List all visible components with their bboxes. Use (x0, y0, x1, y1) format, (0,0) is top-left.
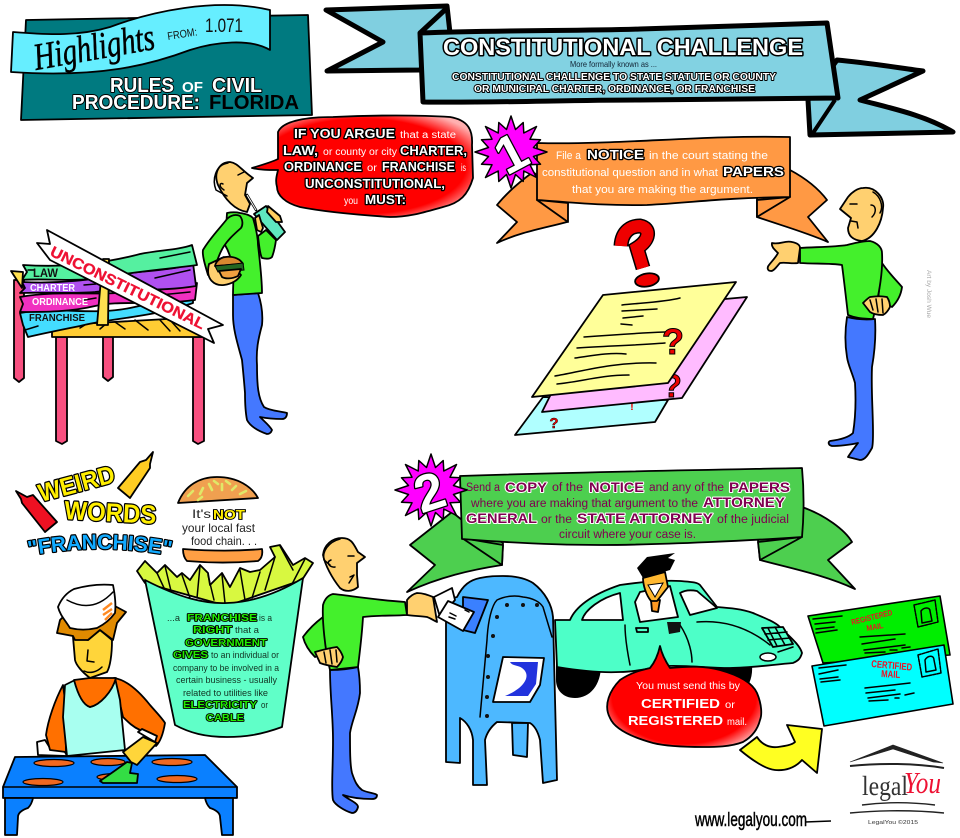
fingers on cup (267, 206, 282, 222)
weird words heading (15, 451, 174, 555)
banner front (460, 468, 804, 545)
words: WORDS (64, 495, 157, 530)
number 2: 2 (407, 461, 453, 525)
step 1 orange banner (497, 137, 828, 243)
teal panel (21, 15, 312, 120)
callout text (628, 680, 747, 728)
burst (475, 116, 547, 188)
franchise: "FRANCHISE" (26, 533, 174, 555)
driver (637, 553, 675, 612)
back leg (512, 723, 528, 757)
table legs (14, 280, 204, 444)
bun text: your local fast (182, 521, 256, 535)
pants (330, 667, 377, 813)
bubble text (283, 126, 467, 207)
carton text: FRANCHISE (187, 612, 257, 624)
paper: ordinance (20, 283, 197, 312)
step 1 text: constitutional question and in what (542, 167, 718, 179)
step 1 text: in the court stating the (649, 150, 768, 162)
logo base lines (850, 803, 944, 813)
paper marks (25, 252, 190, 330)
logo word you: You (904, 765, 941, 800)
yellow sheet (532, 282, 736, 397)
banner description: OR MUNICIPAL CHARTER, ORDINANCE, OR FRANCHISE (474, 84, 755, 95)
top bun (178, 477, 258, 503)
face (73, 630, 112, 678)
left tail (497, 172, 568, 243)
number 1: 1 (485, 122, 538, 187)
banner left tail (326, 6, 450, 71)
paper labels (29, 266, 88, 324)
heading rules of civil procedure: RULES (110, 75, 174, 97)
step 1 text: NOTICE (587, 147, 644, 162)
heading rules of civil procedure: PROCEDURE: (72, 92, 200, 114)
carton text: related to utilities like (183, 688, 268, 698)
papers with question marks: ? (662, 368, 682, 404)
car (555, 553, 802, 699)
step 2 text: STATE ATTORNEY (577, 510, 714, 526)
certified label: CERTIFIED (871, 659, 913, 674)
back arm (303, 617, 330, 657)
carton text (167, 612, 280, 724)
paper labels: LAW (33, 266, 59, 280)
step 2 text: PAPERS (729, 479, 790, 495)
step 2 text: NOTICE (589, 479, 644, 495)
papers with question marks (515, 226, 747, 435)
bun text (182, 507, 257, 548)
green envelope (808, 596, 950, 663)
pants (233, 293, 287, 434)
hand holding mail (407, 593, 437, 622)
banner description (452, 72, 776, 95)
papers with question marks: ! (630, 401, 634, 413)
callout text: mail. (727, 716, 747, 728)
carton text: CABLE (206, 712, 244, 724)
address marks (819, 665, 914, 701)
callout text: REGISTERED (628, 713, 723, 728)
from label: FROM: (167, 26, 198, 43)
header panel: highlights (11, 5, 312, 120)
banner main panel (420, 23, 838, 102)
bubble text: UNCONSTITUTIONAL, (305, 176, 445, 191)
banner front (537, 137, 790, 205)
red speech bubble (252, 116, 473, 217)
burger bun text (178, 477, 262, 562)
step 2 text: of the (552, 482, 583, 494)
banner subtitle: More formally known as ... (570, 59, 657, 69)
right sleeve (114, 678, 165, 746)
certified label: MAIL (881, 669, 900, 681)
bubble text: FRANCHISE (382, 159, 455, 174)
step 2 text: or the (541, 514, 572, 526)
paper labels: ORDINANCE (32, 297, 88, 308)
paper labels: CHARTER (30, 283, 76, 294)
car body (555, 581, 802, 672)
carton (145, 578, 303, 737)
fist (863, 296, 890, 315)
registered label: MAIL (866, 621, 884, 633)
hat (58, 585, 115, 630)
mailbox door (480, 596, 552, 717)
apron (63, 678, 125, 756)
yellow arrow (740, 725, 822, 773)
bubble text: CHARTER, (400, 143, 467, 158)
carton text: ELECTRICITY (183, 699, 257, 711)
bubble text: that a state (400, 130, 456, 141)
table top (52, 318, 203, 337)
ketchup bottle (16, 491, 57, 532)
step 2 text: ATTORNEY (703, 494, 786, 510)
paper: charter (20, 263, 196, 293)
carton text: . . . a (167, 613, 181, 623)
heading rules of civil procedure: OF (182, 79, 203, 96)
bun text: It's (192, 507, 211, 521)
rule number: 1.071 (205, 16, 243, 37)
carton text: RIGHT (193, 624, 233, 636)
left tail (407, 512, 503, 592)
headlight (760, 653, 776, 661)
unconstitutional sash (37, 230, 223, 343)
step 2 text: COPY (505, 479, 548, 495)
sash text: UNCONSTITUTIONAL (47, 243, 207, 333)
windows (582, 586, 717, 622)
burger (215, 257, 244, 278)
logo roof (850, 745, 943, 763)
man pointing at papers (768, 188, 902, 460)
registered label (850, 608, 893, 633)
door handle and mirror (636, 628, 648, 632)
heading rules of civil procedure (72, 75, 299, 114)
carton text: GIVES (173, 649, 208, 661)
registered label: REGISTERED (850, 608, 893, 627)
left sleeve (46, 685, 66, 752)
near arm (203, 215, 242, 275)
banner description: CONSTITUTIONAL CHALLENGE TO STATE STATUTE OR COUNTY (452, 72, 776, 83)
carton text: that a (235, 625, 260, 635)
bubble text: MUST: (365, 192, 406, 207)
bubble text: IF YOU ARGUE (294, 126, 395, 141)
fries (137, 545, 313, 606)
bun text: NOT (213, 507, 245, 522)
torso and arm (323, 594, 407, 670)
torso (225, 212, 262, 295)
bubble text: you (344, 196, 358, 207)
head (323, 538, 365, 591)
stamp (914, 600, 938, 627)
banner right tail (808, 60, 953, 135)
legalyou logo (850, 745, 944, 826)
header banner: constitutional challenge (326, 6, 953, 135)
registered mail envelope (808, 596, 950, 663)
carton text: to an individual or (211, 650, 279, 660)
bubble text: or (367, 163, 378, 174)
cyan ribbon (11, 5, 270, 73)
callout text: CERTIFIED (641, 696, 720, 711)
bubble text: or county or city (323, 147, 397, 158)
cuff (138, 729, 157, 742)
envelopes (434, 588, 474, 631)
collar (74, 678, 116, 707)
fries carton (137, 545, 313, 737)
mustard bottle (118, 452, 153, 498)
carton text: is a (259, 613, 273, 623)
pointing hand (768, 242, 800, 271)
certified mail envelope (812, 645, 953, 726)
left cuff (37, 740, 67, 756)
stamp (918, 649, 941, 677)
right tail (757, 170, 828, 242)
carton text: company to be involved in a (173, 663, 280, 673)
heading rules of civil procedure: CIVIL (212, 75, 262, 97)
bubble text: ORDINANCE (284, 159, 362, 174)
step 2 text: circuit where your case is. (559, 529, 696, 541)
wheels (556, 665, 601, 698)
spatula (100, 762, 138, 783)
step 1 starburst badge (475, 116, 547, 188)
step 1 text: File a (556, 150, 582, 162)
step 2 text: and any of the (649, 482, 724, 494)
drinking straw (247, 195, 256, 210)
burger patties (23, 758, 197, 786)
man with burger and drink (203, 162, 287, 434)
address marks (813, 616, 910, 653)
step 1 text: PAPERS (723, 164, 784, 179)
table with stacked papers (11, 230, 223, 444)
drink cup (254, 206, 285, 240)
papers with question marks: ? (662, 321, 684, 362)
bubble text: LAW, (283, 143, 318, 158)
cyan envelope (812, 645, 953, 726)
large question mark (621, 226, 660, 288)
callout text: You must send this by (636, 680, 741, 692)
step 2 text: of the judicial (717, 514, 789, 526)
website url: www.legalyou.com (694, 810, 807, 831)
step 2 text: GENERAL (466, 510, 537, 526)
arm hand (208, 257, 241, 285)
paper: law (22, 245, 197, 280)
head (840, 188, 883, 241)
mailbox (434, 576, 557, 785)
highlights word: Highlights (30, 16, 158, 79)
bottom bun (183, 549, 262, 562)
torso and arm (800, 241, 882, 319)
step 2 text: Send a (466, 482, 501, 494)
paper labels: FRANCHISE (29, 313, 85, 324)
step 2 green banner (407, 468, 855, 592)
bubble text: is (461, 163, 466, 174)
back arm (878, 263, 902, 307)
burst (395, 454, 467, 526)
paper: franchise (20, 288, 193, 337)
heading rules of civil procedure: FLORIDA (209, 92, 299, 114)
grill table (3, 755, 237, 798)
head (216, 162, 253, 212)
pink sheet (542, 297, 747, 412)
grille (762, 627, 793, 647)
step 1 text (542, 147, 784, 196)
mail slot (463, 597, 488, 633)
man at mailbox (303, 538, 437, 813)
mailbox body (446, 576, 557, 785)
pants (829, 317, 875, 460)
cyan sheet (515, 397, 668, 435)
step 1 text: that you are making the argument. (572, 184, 753, 196)
carton text: GOVERNMENT (185, 637, 268, 649)
callout shape (607, 646, 761, 747)
weird: WEIRD (35, 461, 118, 508)
certified label (871, 659, 913, 681)
bubble shape (252, 116, 473, 217)
callout text: or (725, 699, 736, 711)
postal logo (493, 657, 544, 702)
thumb on cup (255, 215, 263, 232)
art credit: Art by Josh Wue (925, 270, 932, 318)
bun text: food chain. . . (191, 534, 257, 548)
step 2 text: where you are making that argument to the (470, 498, 698, 510)
logo copyright: LegalYou ©2015 (868, 819, 918, 826)
strap (97, 259, 109, 325)
logo word legal: legal (862, 771, 908, 801)
carton text: or (261, 700, 268, 710)
glove (123, 737, 157, 765)
sesame seeds (188, 481, 246, 500)
hair (57, 605, 126, 640)
car details (625, 622, 793, 665)
far arm (258, 230, 276, 259)
papers with question marks: ? (549, 415, 559, 432)
carton text: certain business - usually (176, 675, 277, 685)
step 2 text (466, 479, 790, 541)
red callout bubble (607, 646, 761, 747)
fist (315, 647, 343, 667)
right tail (758, 507, 855, 589)
fast food worker (3, 585, 237, 835)
banner title: CONSTITUTIONAL CHALLENGE (443, 34, 803, 60)
rivets (485, 603, 539, 718)
step 2 starburst badge (395, 454, 467, 526)
